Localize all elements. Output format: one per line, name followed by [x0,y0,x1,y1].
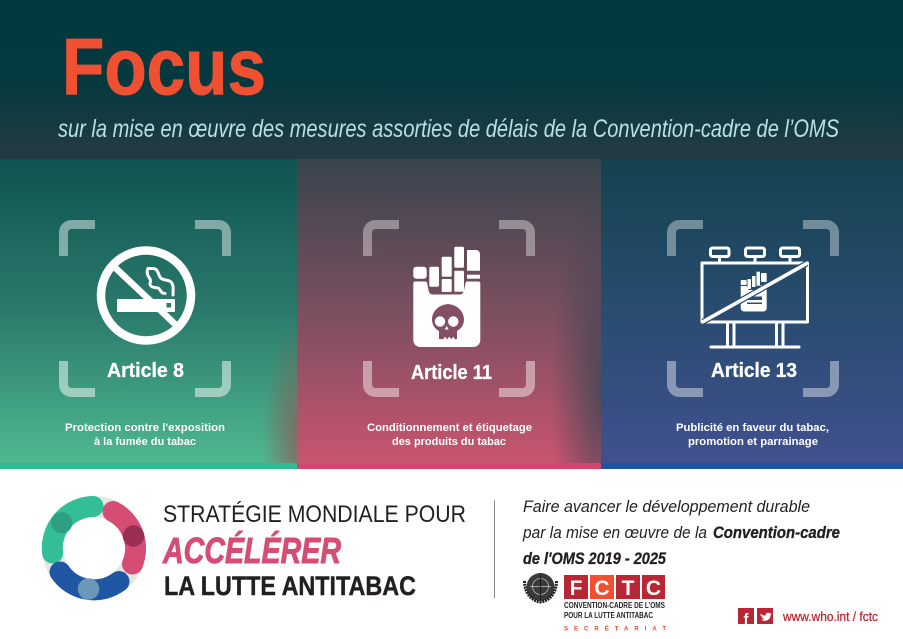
logo: FCTC: F [570,577,583,600]
text block: sustainable development: par la mise en œuvre de la [522,524,707,542]
logo text: strategy [162,501,466,601]
logo text: strategy: LA LUTTE ANTITABAC [164,571,416,601]
description: Article 8: Protection contre l'exposition [65,422,225,434]
description: Article 13: promotion et parrainage [688,436,818,448]
logo: FCTC: POUR LA LUTTE ANTITABAC [564,611,653,620]
description: Article 11 [367,422,532,448]
description: Article 11: des produits du tabac [392,436,506,448]
icon: twitter [757,608,773,624]
heading: Article 13: Article 13 [711,360,797,382]
corner brackets [368,224,530,392]
text block: sustainable development: Faire avancer le développement durable [523,498,810,516]
heading: Article 8: Article 8 [107,360,184,382]
link: website: www.who.int / fctc [782,610,878,624]
description: Article 8: à la fumée du tabac [94,436,196,448]
logo: FCTC: C [594,577,610,600]
description: Article 13: Publicité en faveur du tabac, [676,422,829,434]
logo: strategy ring [51,506,144,600]
text block: sustainable development [522,498,840,568]
icon: cigarette pack with skull [413,247,480,347]
panel: article 8 [0,159,297,469]
logo: FCTC: CONVENTION-CADRE DE L’OMS [564,601,665,610]
logo: FCTC: SECRÉTARIAT [564,624,666,632]
corner brackets [672,224,834,392]
heading: Article 11: Article 11 [411,362,492,384]
icon: crossed billboard [702,248,808,347]
logo: FCTC: C [646,577,661,600]
description: Article 11: Conditionnement et étiquetage [367,422,532,434]
logo text: strategy: STRATÉGIE MONDIALE POUR [163,501,466,528]
icon: no smoking [101,250,191,340]
description: Article 8 [65,422,225,448]
logo: FCTC: T [622,577,635,600]
panel: article 13 [601,159,903,469]
panel: article 11 [297,159,601,469]
corner brackets [64,224,226,392]
icon: facebook [738,608,754,628]
logo: WHO emblem [524,573,556,603]
icon: facebook: f [744,611,750,628]
title: Focus [62,22,266,111]
logo: FCTC [564,575,666,632]
text block: sustainable development: Convention-cadre [713,524,840,542]
text block: sustainable development: de l'OMS 2019 - 2025 [523,550,667,568]
logo text: strategy: ACCÉLÉRER [162,530,341,571]
description: Article 13 [676,422,829,448]
header band [0,0,903,159]
